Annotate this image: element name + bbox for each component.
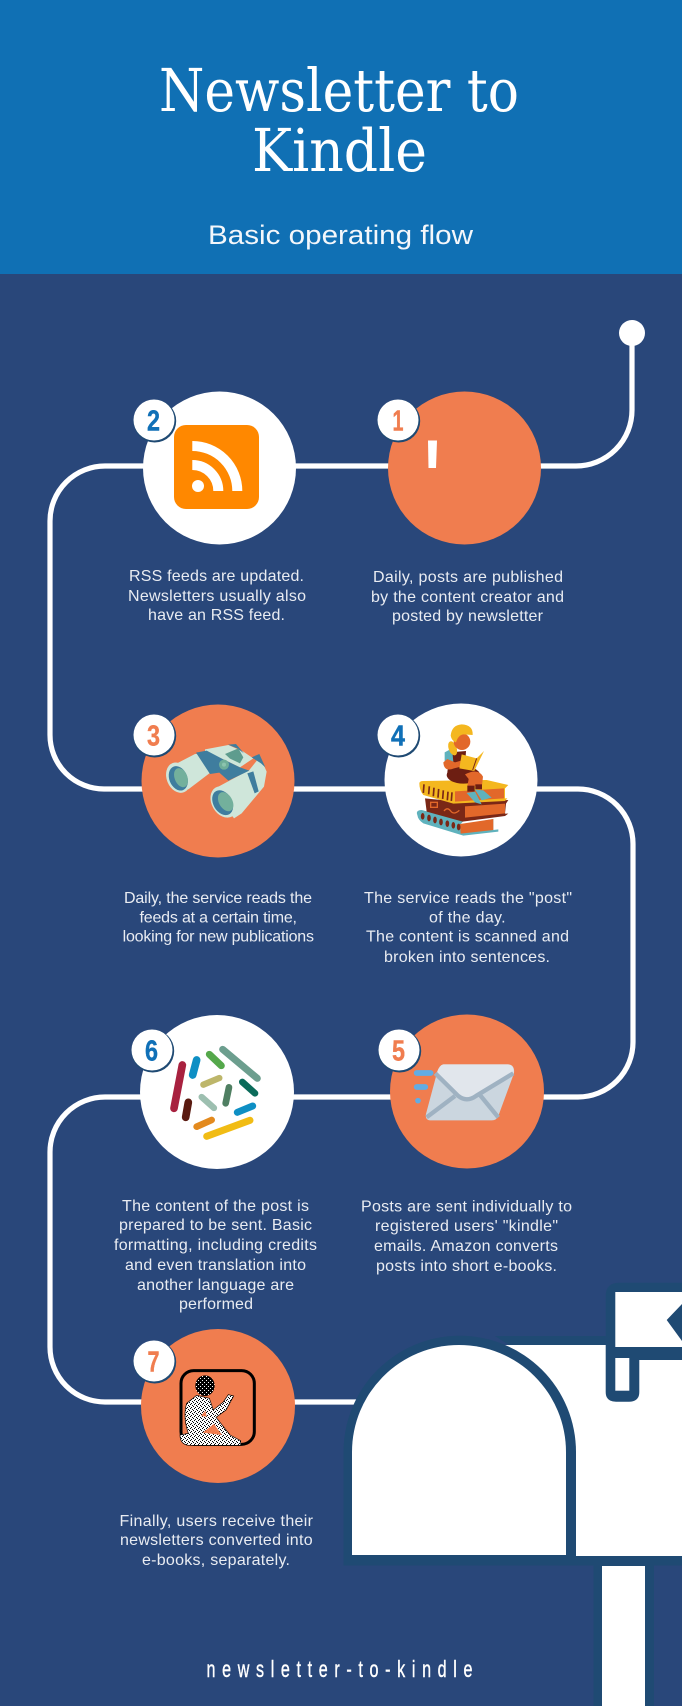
step 6 text: and even translation into [125,1257,306,1274]
step 6 text: formatting, including credits [114,1237,317,1254]
step 2 circle [143,392,296,544]
flow line [50,320,645,1402]
step 6 text: performed [179,1296,253,1313]
icon: white mark [428,440,437,468]
step 5 text: emails. Amazon converts [374,1238,558,1255]
step 1 text [371,569,564,625]
step 3 text [123,890,314,946]
step 4 text: broken into sentences. [384,949,550,966]
step 7 badge: 7 [148,1346,160,1378]
step 6 circle [140,1015,294,1169]
step 1 badge [377,400,420,442]
step 5 text: posts into short e-books. [376,1258,557,1275]
step 4 text [364,890,572,966]
step 6 text: The content of the post is [122,1198,309,1215]
step 5 text [361,1198,572,1275]
title [159,56,519,185]
step 1 text: by the content creator and [371,589,564,606]
step 5 badge: 5 [392,1036,405,1068]
step 6 badge: 6 [145,1036,158,1068]
step 6 text [114,1198,317,1313]
step 7 badge [133,1340,176,1384]
step 1 text: Daily, posts are published [373,569,563,586]
step 7 text: newsletters converted into [120,1532,313,1549]
title: Kindle [252,116,427,185]
mailbox body [344,1336,682,1566]
step 4 badge [377,714,420,758]
step 6 text: another language are [137,1277,294,1294]
step 2 badge: 2 [147,406,160,438]
step 4 text: of the day. [429,910,506,926]
step 3 text: looking for new publications [123,928,314,946]
step 1 badge: 1 [392,406,404,438]
step 1 circle [388,392,541,544]
icon: girl reading on books [417,724,508,836]
step 2 text: have an RSS feed. [148,607,285,624]
subtitle: Basic operating flow [208,220,474,250]
step 4 circle [384,704,538,856]
step 7 circle [141,1329,295,1483]
step 5 text: registered users' "kindle" [375,1218,558,1235]
mailbox flag [495,1283,682,1402]
mailbox [344,1283,682,1706]
step 5 circle [390,1014,544,1168]
step 3 text: feeds at a certain time, [140,910,297,926]
step 3 text: Daily, the service reads the [124,890,312,907]
step 2 text: RSS feeds are updated. [129,568,304,585]
step 7 text [120,1513,314,1569]
step 6 badge [131,1030,174,1072]
title: Newsletter to [159,56,519,125]
step 3 circle [142,704,294,858]
step 4 badge: 4 [391,720,405,752]
footer label: newsletter-to-kindle [206,1657,472,1683]
step 5 badge [378,1030,421,1072]
icon: envelope [415,1064,514,1120]
step 2 text: Newsletters usually also [128,588,306,605]
step 7 text: Finally, users receive their [120,1513,314,1530]
icon: RSS [174,425,259,509]
icon: kindle reader [180,1371,254,1445]
header band [0,0,682,274]
icon: coloured sticks [174,1049,257,1136]
step 7 text: e-books, separately. [142,1552,290,1569]
icon: binoculars [162,744,267,823]
step 4 text: The service reads the "post" [364,890,572,907]
step 2 badge [133,400,176,442]
step 6 text: prepared to be sent. Basic [119,1217,312,1234]
step 5 text: Posts are sent individually to [361,1198,572,1216]
step 1 text: posted by newsletter [392,608,544,625]
step 2 text [128,568,306,624]
mailbox post [594,1555,654,1706]
step 3 badge: 3 [147,720,160,752]
step 3 badge [133,714,176,758]
step 4 text: The content is scanned and [366,928,569,946]
